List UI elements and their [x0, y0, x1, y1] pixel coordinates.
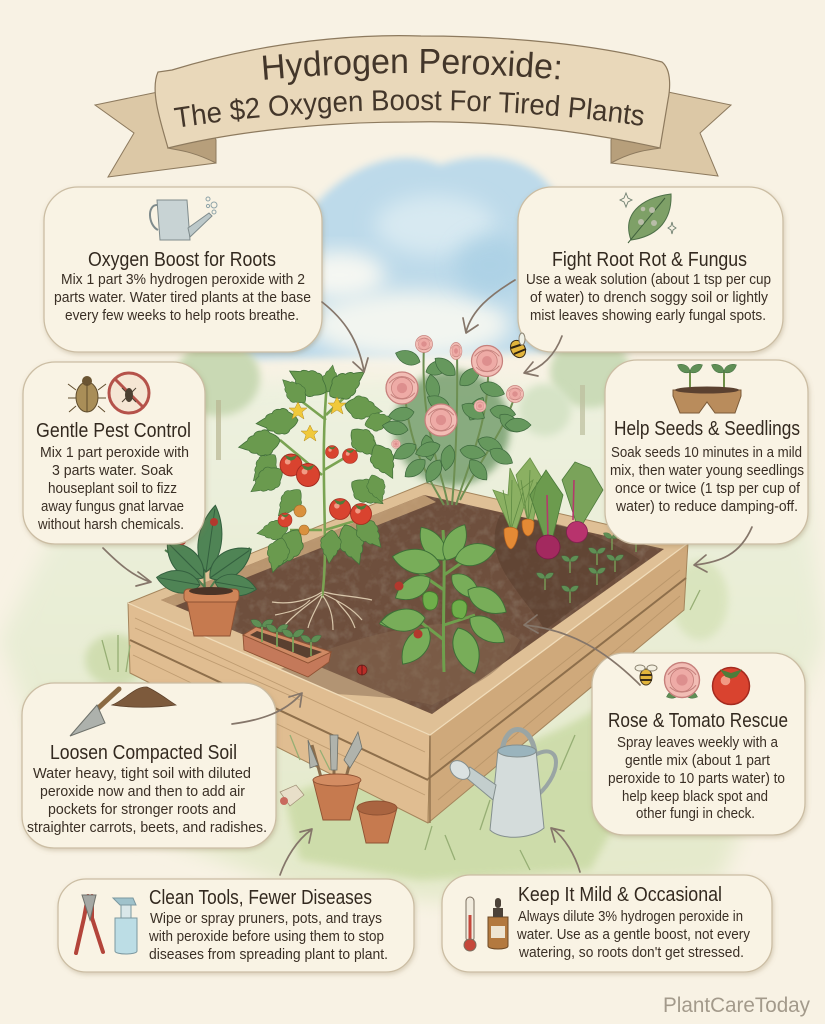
text block: watering, so roots don't get stressed.: [518, 945, 744, 961]
text block: peroxide to 10 parts water) to: [608, 771, 785, 787]
text block: [608, 735, 785, 822]
icon: soil mound: [112, 687, 176, 707]
heading: Gentle Pest Control: [36, 420, 191, 442]
icon: seedling tray: [673, 362, 741, 413]
icon: watering can: [150, 197, 217, 240]
text block: [516, 909, 751, 961]
text block: mist leaves showing early fungal spots.: [530, 308, 766, 324]
panel: clean tools: [58, 879, 414, 972]
text block: [526, 272, 771, 324]
text block: houseplant soil to fizz: [48, 481, 177, 497]
title line 1: Hydrogen Peroxide:: [262, 49, 560, 85]
text block: mix, then water young seedlings: [610, 463, 804, 479]
icon: spotted leaf: [620, 193, 676, 243]
heading: Clean Tools, Fewer Diseases: [149, 887, 372, 909]
panel: fight root rot and fungus: [518, 187, 783, 352]
text block: of water) to drench soggy soil or lightly: [530, 290, 769, 306]
text block: once or twice (1 tsp per cup of: [615, 481, 801, 497]
watering can: [446, 730, 556, 837]
arrows: [103, 280, 752, 875]
panel: oxygen boost for roots: [44, 187, 322, 352]
ladybug on soil: [357, 665, 367, 675]
potted plant: [155, 504, 258, 636]
text block: away fungus gnat larvae: [41, 499, 184, 515]
title banner: [94, 35, 732, 178]
text block: Water heavy, tight soil with diluted: [33, 766, 251, 782]
text block: Soak seeds 10 minutes in a mild: [611, 445, 802, 461]
icon: trowel: [70, 689, 119, 736]
icon: bee: [635, 665, 657, 685]
icon: no insects sign: [109, 373, 149, 413]
icon: spray bottle: [113, 898, 137, 954]
text block: [610, 445, 804, 515]
text block: [54, 272, 311, 324]
heading: Fight Root Rot & Fungus: [552, 249, 747, 271]
text block: Spray leaves weekly with a: [617, 735, 779, 751]
illustration: sky and clouds: [240, 157, 630, 360]
panel: help seeds and seedlings: [605, 360, 808, 544]
panel: loosen compacted soil: [22, 683, 276, 848]
title line 2: The $2 Oxygen Boost For Tired Plants: [174, 90, 644, 127]
tomato roots: [272, 592, 372, 630]
icon: rose: [664, 662, 700, 700]
text block: other fungi in check.: [636, 806, 755, 822]
icon: thermometer: [464, 897, 476, 951]
ribbon folds: [168, 131, 660, 163]
text block: [37, 445, 189, 533]
text block: Mix 1 part 3% hydrogen peroxide with 2: [61, 272, 305, 288]
main ribbon: [155, 36, 670, 148]
tomato plant: [236, 360, 403, 598]
text block: 3 parts water. Soak: [52, 463, 174, 479]
icon: tomato: [712, 668, 750, 704]
rose bush: [381, 336, 531, 505]
heading: Oxygen Boost for Roots: [88, 249, 276, 271]
right ribbon tail: [611, 92, 731, 176]
panel: keep it mild and occasional: [442, 875, 772, 972]
text block: Always dilute 3% hydrogen peroxide in: [518, 909, 743, 925]
watermark: PlantCareToday: [663, 994, 810, 1017]
text block: diseases from spreading plant to plant.: [149, 947, 388, 963]
text block: Mix 1 part peroxide with: [40, 445, 189, 461]
grass tufts: [102, 590, 700, 870]
left ribbon tail: [95, 92, 216, 177]
text block: gentle mix (about 1 part: [625, 753, 770, 769]
raised garden bed: [128, 483, 688, 823]
panel: gentle pest control: [23, 362, 205, 544]
trough of seedlings: [243, 617, 331, 677]
text block: Wipe or spray pruners, pots, and trays: [150, 911, 382, 927]
pepper plant: [377, 520, 512, 677]
text block: pockets for stronger roots and: [48, 802, 236, 818]
tools in pot: [280, 732, 362, 820]
text block: without harsh chemicals.: [37, 517, 184, 533]
heading: Rose & Tomato Rescue: [608, 710, 788, 732]
text block: water. Use as a gentle boost, not every: [516, 927, 751, 943]
text block: parts water. Water tired plants at the base: [54, 290, 311, 306]
text block: every few weeks to help roots breathe.: [65, 308, 299, 324]
heading: Keep It Mild & Occasional: [518, 884, 722, 906]
text block: help keep black spot and: [622, 789, 768, 805]
text block: straighter carrots, beets, and radishes.: [27, 820, 267, 836]
heading: Loosen Compacted Soil: [50, 742, 237, 764]
icon: pruners: [76, 895, 103, 953]
small terracotta pot: [357, 801, 397, 843]
text block: [148, 911, 388, 963]
heading: Help Seeds & Seedlings: [614, 418, 800, 440]
illustration: lawn and distant trees: [0, 336, 825, 905]
text block: [27, 766, 267, 836]
icon: beetle: [68, 376, 106, 412]
panel: rose and tomato rescue: [592, 653, 805, 835]
bee near roses: [507, 333, 529, 360]
seedlings in soil: [535, 531, 646, 603]
icon: dropper bottle: [488, 898, 508, 949]
text block: with peroxide before using them to stop: [148, 929, 384, 945]
text block: peroxide now and then to add air: [40, 784, 245, 800]
text block: water) to reduce damping-off.: [615, 499, 798, 515]
text block: Use a weak solution (about 1 tsp per cup: [526, 272, 771, 288]
carrots and beets: [493, 458, 603, 559]
